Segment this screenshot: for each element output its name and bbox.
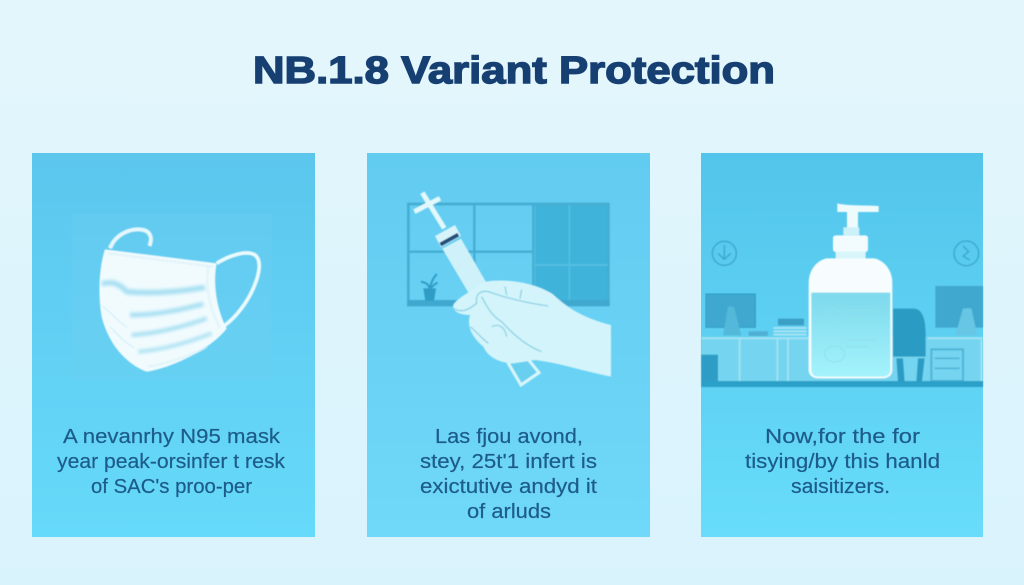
office background bbox=[701, 241, 983, 387]
illustration: window and syringe in hand bbox=[407, 193, 611, 385]
text: vaccine caption: stey, 25t'1 infert is bbox=[420, 451, 597, 473]
icon: face mask bbox=[72, 213, 272, 380]
text: vaccine caption: exictutive andyd it bbox=[420, 476, 597, 498]
window bbox=[407, 204, 610, 306]
text: vaccine caption: Las fjou avond, bbox=[435, 426, 583, 448]
illustration: office and sanitizer bottle bbox=[701, 203, 983, 387]
title: NB.1.8 Variant Protection bbox=[253, 50, 775, 92]
text: mask caption: year peak-orsinfer t resk bbox=[57, 451, 286, 473]
icon: wall clock right bbox=[954, 241, 979, 266]
hand bbox=[453, 280, 611, 377]
panel: vaccine syringe bbox=[367, 153, 650, 537]
text: sanitizer caption: Now,for the for bbox=[765, 426, 920, 448]
sanitizer bottle bbox=[809, 203, 892, 378]
panel: N95 mask bbox=[32, 153, 315, 537]
icon: wall clock left bbox=[712, 241, 736, 265]
icon: plant bbox=[423, 288, 436, 301]
text: sanitizer caption: saisitizers. bbox=[791, 476, 890, 498]
text: vaccine caption bbox=[420, 426, 597, 523]
text: vaccine caption: of arluds bbox=[467, 501, 551, 523]
text: sanitizer caption bbox=[745, 426, 940, 498]
text: mask caption bbox=[57, 426, 286, 498]
text: mask caption: of SAC's proo-per bbox=[91, 476, 252, 498]
text: mask caption: A nevanrhy N95 mask bbox=[63, 426, 281, 448]
syringe bbox=[414, 193, 539, 385]
panel: hand sanitizer bbox=[701, 153, 983, 537]
text: sanitizer caption: tisying/by this hanld bbox=[745, 451, 940, 473]
